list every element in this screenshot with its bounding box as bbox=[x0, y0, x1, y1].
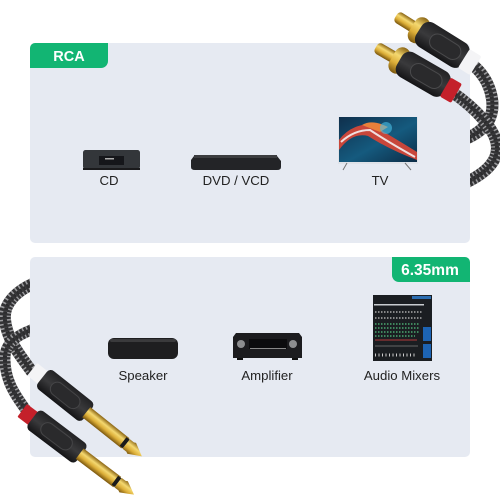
panel: RCA devices bbox=[30, 43, 470, 243]
icon: audio mixer bbox=[373, 295, 432, 361]
icon: TV bbox=[338, 117, 418, 170]
RCA plug: red bbox=[369, 35, 464, 106]
label: Audio Mixers: Audio Mixers bbox=[364, 368, 441, 383]
6.35mm tab bbox=[392, 257, 470, 282]
6.35mm plug: red bbox=[15, 401, 141, 500]
icon: speaker bbox=[108, 338, 178, 359]
label: CD: CD bbox=[99, 173, 119, 188]
6.35mm plug: white bbox=[25, 360, 149, 466]
6.35mm cables bbox=[5, 281, 40, 410]
label: Speaker: Speaker bbox=[118, 368, 168, 383]
label: Amplifier: Amplifier bbox=[241, 368, 293, 383]
label: DVD / VCD: DVD / VCD bbox=[203, 173, 269, 188]
icon: CD player bbox=[83, 150, 140, 170]
RCA cables bbox=[452, 66, 497, 186]
panel: 6.35mm devices bbox=[30, 257, 470, 457]
label: TV: TV bbox=[372, 173, 389, 188]
icon: DVD player bbox=[191, 155, 281, 170]
RCA tab: RCA bbox=[53, 49, 85, 65]
RCA plug: white bbox=[389, 4, 483, 78]
icon: amplifier bbox=[233, 333, 302, 360]
RCA tab bbox=[30, 43, 108, 68]
6.35mm tab: 6.35mm bbox=[401, 262, 459, 279]
